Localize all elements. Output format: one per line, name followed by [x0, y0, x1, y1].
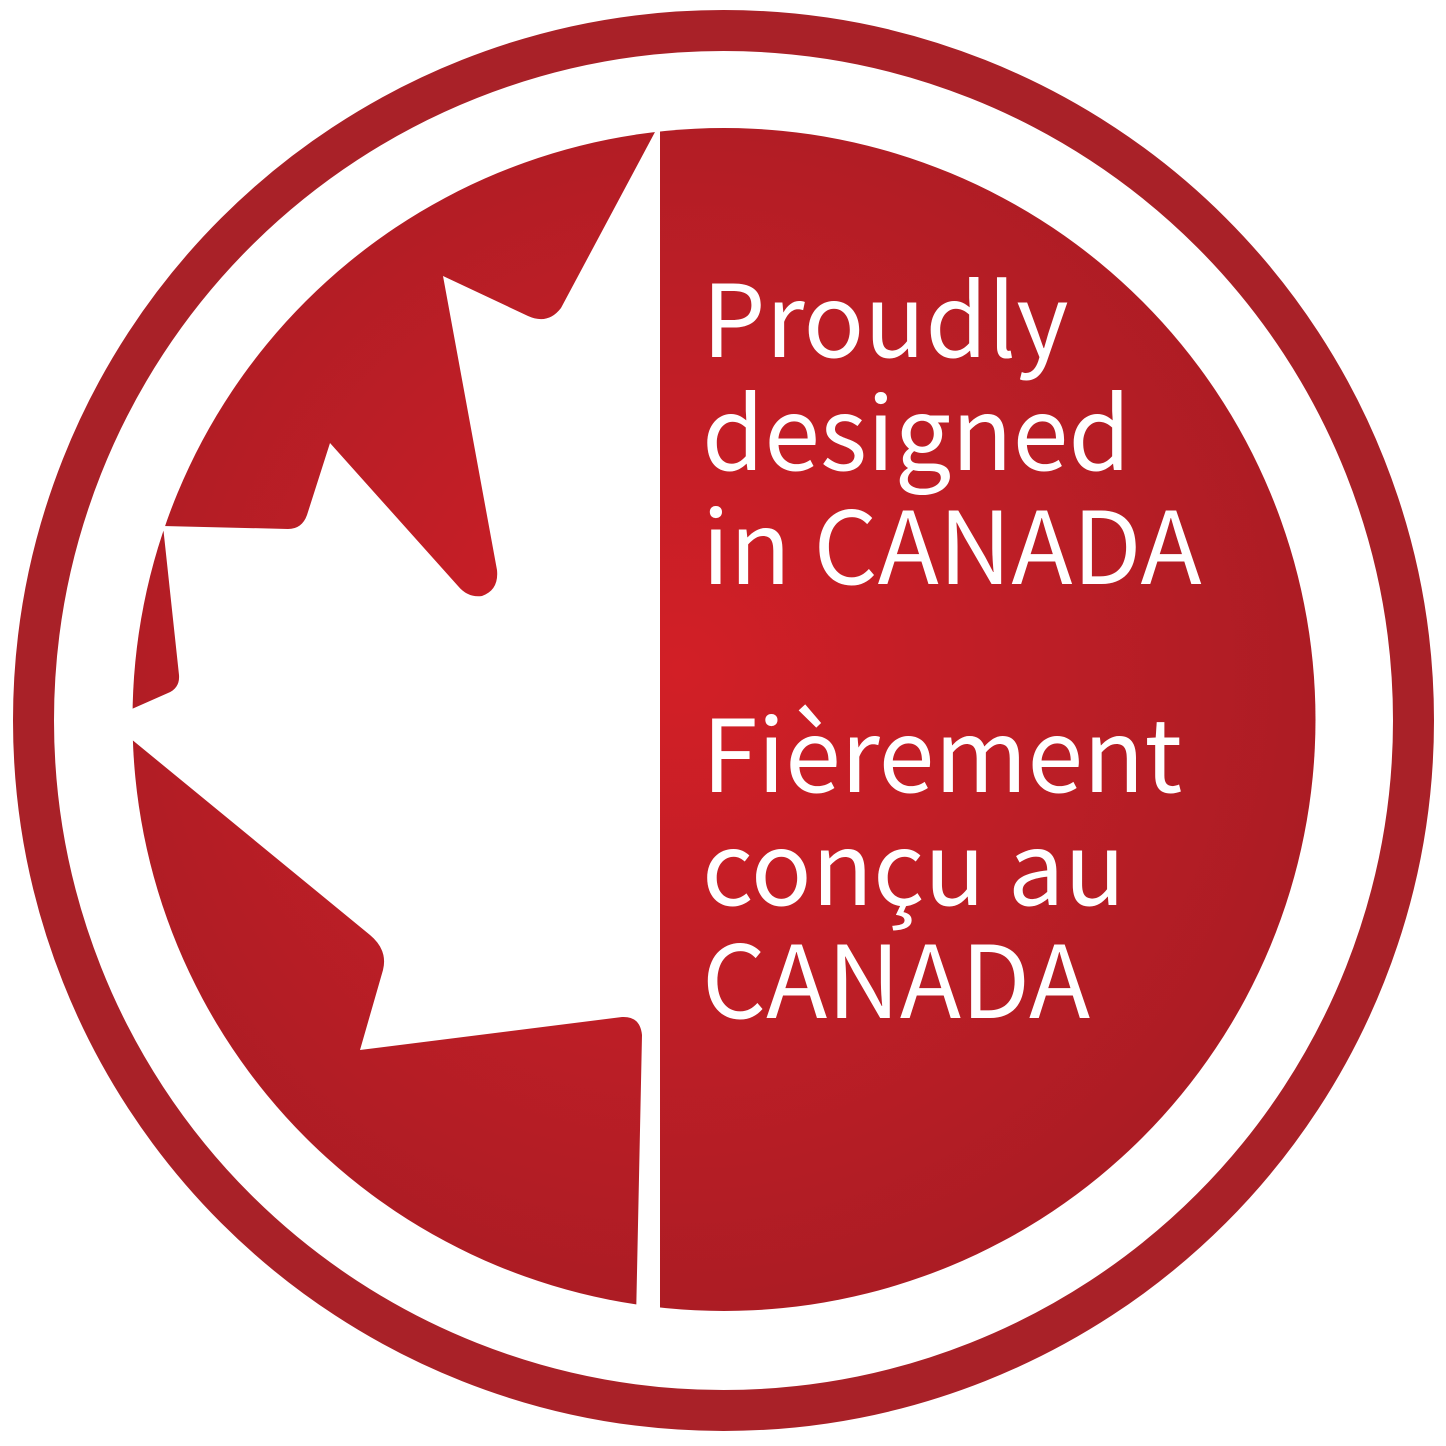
inner red disc — [132, 128, 1316, 1311]
text: English — [702, 240, 1202, 613]
text: French: conçu au — [702, 788, 1125, 934]
text: French — [702, 675, 1182, 1047]
text: English: Proudly — [702, 240, 1069, 386]
text: English: in CANADA — [702, 467, 1202, 613]
text: French: Fièrement — [702, 675, 1182, 821]
text: English: designed — [702, 353, 1131, 499]
vertical divider — [655, 120, 660, 1320]
text: French: CANADA — [702, 901, 1090, 1047]
icon: white half maple leaf — [125, 120, 658, 1320]
